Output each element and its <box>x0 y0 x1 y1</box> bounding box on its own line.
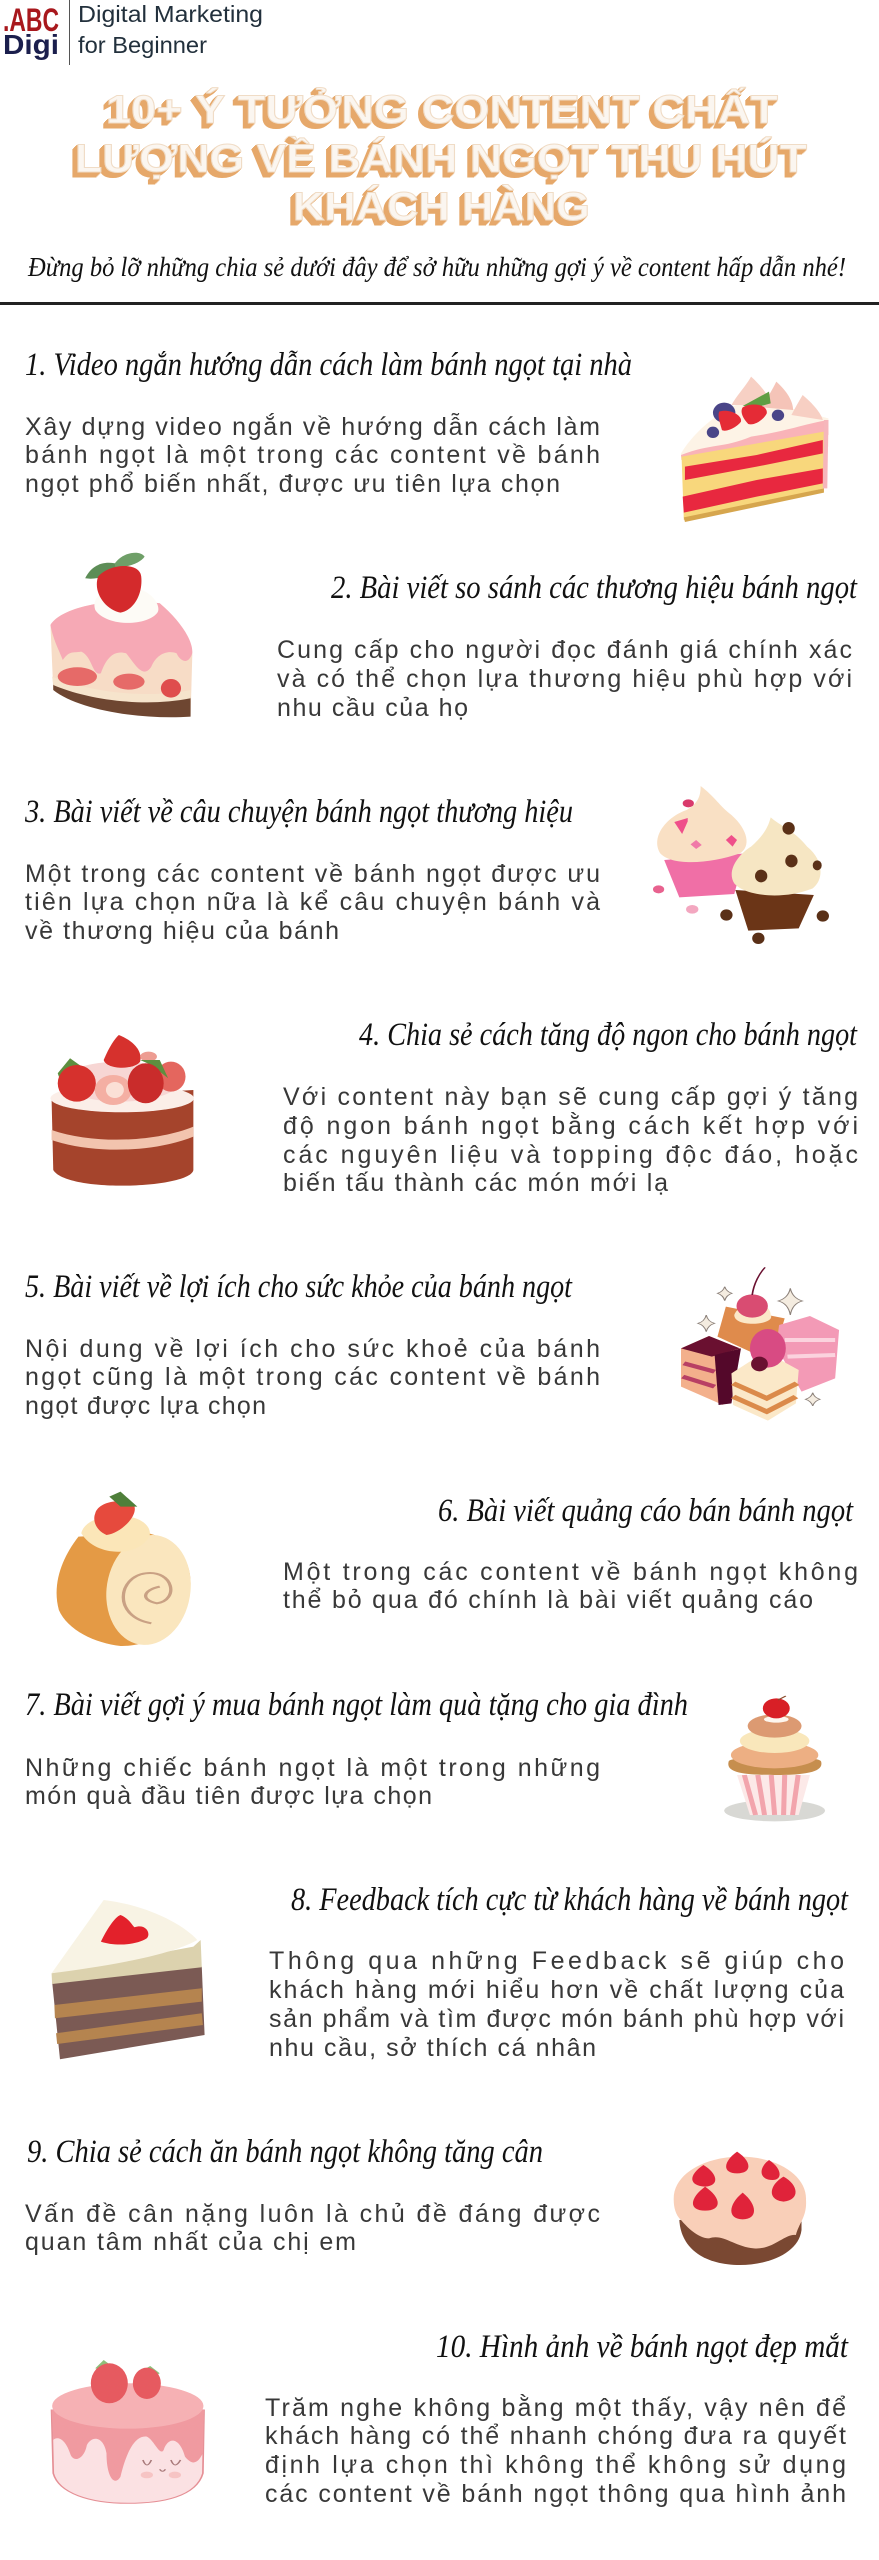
icon: strawberry mousse cake <box>50 553 192 717</box>
body text 10: các content về bánh ngọt thông qua hình ảnh <box>265 2480 846 2508</box>
body text 9: quan tâm nhất của chị em <box>25 2228 356 2256</box>
body text 8: Thông qua những Feedback sẽ giúp cho <box>269 1947 844 1975</box>
body text 10 <box>265 2393 846 2508</box>
body text 1: bánh ngọt là một trong các content về bánh <box>25 441 600 469</box>
section 8: customer feedback <box>52 1882 849 2062</box>
logo: ABC Digi: for Beginner <box>78 32 207 58</box>
body text 4 <box>283 1083 858 1197</box>
logo: ABC Digi: Digital Marketing <box>78 1 263 27</box>
body text 2: nhu cầu của họ <box>277 694 468 722</box>
section 4: taste tips <box>50 1017 858 1197</box>
logo: ABC Digi: Digi <box>3 29 59 60</box>
icon: swiss roll with strawberry <box>57 1492 195 1646</box>
body text 6 <box>283 1558 858 1614</box>
section 9: no weight gain <box>25 2134 806 2265</box>
icon: chocolate cake slice with heart <box>52 1900 205 2059</box>
body text 1 <box>25 412 600 498</box>
icon: layered strawberry cake slice <box>681 377 828 522</box>
icon: round strawberry cake <box>674 2152 806 2265</box>
section 1: video <box>25 347 828 522</box>
body text 6: thể bỏ qua đó chính là bài viết quảng cáo <box>283 1586 813 1614</box>
body text 8 <box>269 1947 844 2062</box>
body text 5: ngọt được lựa chọn <box>25 1392 266 1420</box>
body text 5 <box>25 1335 600 1420</box>
section 2: brand comparison <box>50 553 858 722</box>
body text 8: khách hàng mới hiểu hơn về chất lượng của <box>269 1976 844 2004</box>
body text 3: Một trong các content về bánh ngọt được ưu <box>25 860 600 888</box>
body text 4: Với content này bạn sẽ cung cấp gợi ý tăng <box>283 1083 858 1111</box>
body text 9: Vấn đề cân nặng luôn là chủ đề đáng được <box>25 2200 600 2228</box>
title: 10+ Ý TƯỞNG CONTENT CHẤT <box>106 86 778 132</box>
logo: ABC Digi: .ABC <box>3 2 59 38</box>
body text 4: biến tấu thành các món mới lạ <box>283 1169 668 1197</box>
title <box>75 86 807 229</box>
body text 5: Nội dung về lợi ích cho sức khoẻ của bánh <box>25 1335 600 1363</box>
body text 4: các nguyên liệu và topping độc đáo, hoặc <box>283 1141 858 1169</box>
body text 3: tiên lựa chọn nữa là kể câu chuyện bánh và <box>25 888 600 916</box>
body text 5: ngọt cũng là một trong các content về bánh <box>25 1363 600 1391</box>
body text 8: sản phẩm và tìm được món bánh phù hợp với <box>269 2005 844 2033</box>
section 5: health benefits <box>25 1267 839 1421</box>
body text 2: và có thể chọn lựa thương hiệu phù hợp với <box>277 665 852 693</box>
icon: two cupcakes <box>653 786 829 944</box>
section 3: brand story <box>24 786 829 945</box>
body text 3 <box>25 860 600 945</box>
body text 3: về thương hiệu của bánh <box>25 917 339 945</box>
section 6: advertising <box>57 1492 858 1646</box>
body text 7 <box>25 1754 600 1810</box>
body text 1: Xây dựng video ngắn về hướng dẫn cách làm <box>25 412 600 441</box>
title: LƯỢNG VỀ BÁNH NGỌT THU HÚT <box>75 135 807 181</box>
section 10: beautiful images <box>52 2329 849 2508</box>
heading 1: 1. Video ngắn hướng dẫn cách làm bánh ngọt tại nhà <box>25 347 632 383</box>
body text 2 <box>277 636 852 722</box>
body text 7: món quà đầu tiên được lựa chọn <box>25 1782 432 1810</box>
heading 3: 3. Bài viết về câu chuyện bánh ngọt thương hiệu <box>24 794 573 830</box>
section 7: gift suggestion <box>25 1687 825 1821</box>
body text 2: Cung cấp cho người đọc đánh giá chính xác <box>277 636 852 664</box>
body text 9 <box>25 2200 600 2256</box>
logo: ABC Digi <box>3 0 263 65</box>
icon: pink striped cupcake <box>724 1696 825 1821</box>
body text 10: định lựa chọn thì không thể không sử dụng <box>265 2451 846 2479</box>
body text 10: Trăm nghe không bằng một thấy, vậy nên để <box>265 2393 846 2422</box>
icon: assorted petit fours with cherry <box>681 1267 839 1421</box>
heading 7: 7. Bài viết gợi ý mua bánh ngọt làm quà tặng cho gia đình <box>25 1687 688 1723</box>
body text 8: nhu cầu, sở thích cá nhân <box>269 2034 596 2062</box>
heading 5: 5. Bài viết về lợi ích cho sức khỏe của bánh ngọt <box>25 1269 573 1305</box>
icon: red velvet cake with strawberries <box>50 1035 194 1186</box>
title: KHÁCH HÀNG <box>293 184 590 229</box>
body text 7: Những chiếc bánh ngọt là một trong những <box>25 1754 600 1782</box>
icon: kawaii pink cake with strawberries <box>52 2360 204 2503</box>
heading 9: 9. Chia sẻ cách ăn bánh ngọt không tăng cân <box>27 2134 543 2170</box>
body text 1: ngọt phổ biến nhất, được ưu tiên lựa chọn <box>25 470 560 498</box>
body text 10: khách hàng có thể nhanh chóng đưa ra quyết <box>265 2422 846 2450</box>
body text 6: Một trong các content về bánh ngọt không <box>283 1558 858 1586</box>
body text 4: độ ngon bánh ngọt bằng cách kết hợp với <box>283 1111 858 1140</box>
